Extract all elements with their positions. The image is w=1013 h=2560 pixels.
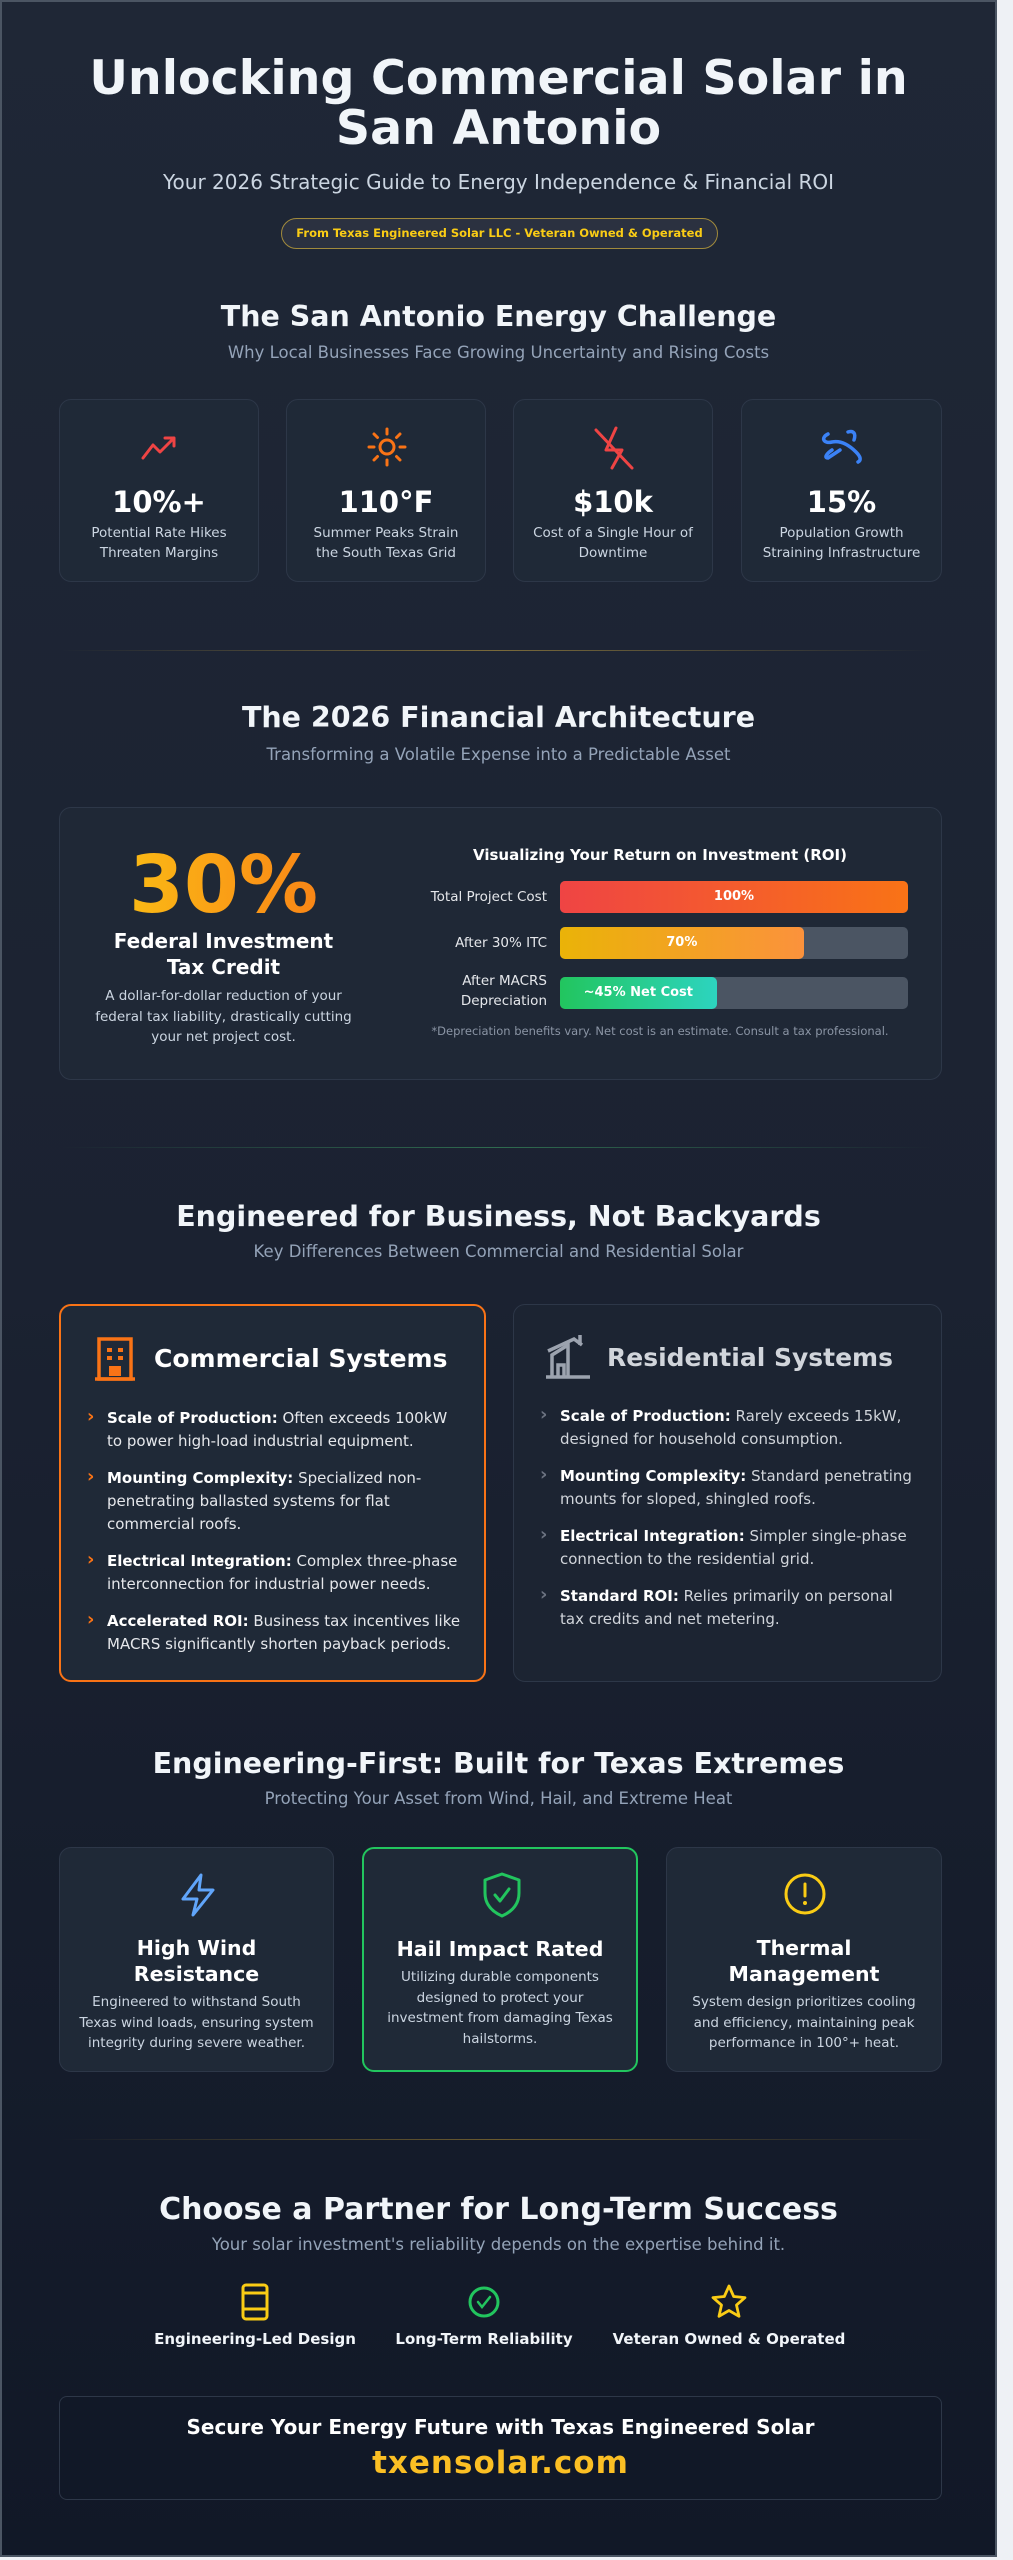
card: heat [286,399,486,582]
title: High Wind [137,1936,256,1960]
bar chart: After MACRS [462,973,547,989]
subheading: Protecting Your Asset from Wind, Hail, and Extreme Heat [265,1789,732,1808]
title: Commercial Systems [154,1344,447,1373]
description: Downtime [579,545,647,561]
icon: building [95,1337,135,1381]
icon: trend up [141,436,176,460]
title: Residential Systems [607,1343,893,1372]
list: Scale of Production: Rarely exceeds 15kW, designed for household consumption. [560,1407,901,1448]
stat: $10k [573,485,653,519]
big stat 30%: 30% [129,839,318,931]
heading: engineering-first: Engineering-First: Built for Texas Extremes [153,1747,844,1780]
ITC label: Tax Credit [167,955,280,979]
description: Cost of a Single Hour of [533,525,693,541]
feature: engineering-led design: Engineering-Led Design [154,2330,356,2348]
subheading: Why Local Businesses Face Growing Uncertainty and Rising Costs [228,343,769,362]
description: Engineered to withstand South Texas wind loads, ensuring system integrity during severe weather. [79,1994,314,2051]
ITC description: A dollar-for-dollar reduction of your federal tax liability, drastically cutting your net project cost. [95,988,352,1045]
subheading: Transforming a Volatile Expense into a Predictable Asset [266,745,730,764]
stat: 15% [807,485,876,519]
list: Electrical Integration: Complex three-phase interconnection for industrial power needs. [107,1552,457,1593]
list: Mounting Complexity: Specialized non-penetrating ballasted systems for flat commercial roofs. [107,1469,421,1533]
bar chart: After 30% ITC [455,935,547,951]
bar chart: Depreciation [461,993,547,1009]
list: Accelerated ROI: Business tax incentives like MACRS significantly shorten payback periods. [107,1612,460,1653]
bar chart: ~45% Net Cost [584,985,693,1000]
list: Scale of Production: Often exceeds 100kW to power high-load industrial equipment. [107,1409,447,1450]
card: population [741,399,942,582]
description: Threaten Margins [100,545,218,561]
card: thermal [666,1847,942,2072]
URL: txensolar.com [372,2445,629,2481]
list [88,1409,460,1653]
feature: reliability [395,2286,573,2348]
badge [281,218,718,249]
ITC label: Federal Investment [114,929,333,953]
heading: financial architecture: The 2026 Financial Architecture [242,701,755,734]
subheading: Your solar investment's reliability depends on the expertise behind it. [212,2235,785,2254]
description [533,525,694,561]
list: Standard ROI: Relies primarily on personal tax credits and net metering. [560,1587,893,1628]
description [91,525,227,561]
description: the South Texas Grid [316,545,456,561]
title: San Antonio [336,101,661,156]
card: downtime [513,399,713,582]
description: Potential Rate Hikes [91,525,227,541]
stat: 10%+ [112,485,206,519]
bar chart: 70% [666,935,697,950]
panel: residential systems [513,1304,942,1682]
description: Utilizing durable components designed to protect your investment from damaging Texas hailstorms. [387,1969,613,2046]
bar chart: Total Project Cost [431,889,547,905]
title: Thermal [757,1936,851,1960]
heading: partner: Choose a Partner for Long-Term Success [159,2192,838,2227]
title [134,1936,259,1986]
list [542,1407,912,1628]
panel: commercial systems [59,1304,486,1682]
card: hail [362,1847,638,2072]
subtitle: Your 2026 Strategic Guide to Energy Independence & Financial ROI [163,170,834,194]
chart title: Visualizing Your Return on Investment (ROI) [473,846,847,864]
icon: power off [594,426,634,470]
subheading: Key Differences Between Commercial and Residential Solar [254,1242,743,1261]
heading: commercial vs residential: Engineered for Business, Not Backyards [176,1200,821,1233]
feature: engineering-led design [154,2284,356,2348]
icon: check circle [468,2286,500,2318]
description [763,525,920,561]
title: Hail Impact Rated [397,1937,603,1961]
icon: star [712,2284,746,2318]
description: Population Growth [779,525,904,541]
bar chart [430,881,908,1009]
description: System design prioritizes cooling and efficiency, maintaining peak performance in 100°+ heat. [692,1994,916,2051]
list: Electrical Integration: Simpler single-phase connection to the residential grid. [560,1527,907,1568]
panel: financial [59,807,942,1080]
badge: From Texas Engineered Solar LLC - Veteran Owned & Operated [296,226,703,240]
title: Management [729,1962,879,1986]
description: Summer Peaks Strain [314,525,458,541]
bar chart: 100% [714,889,754,904]
footnote: *Depreciation benefits vary. Net cost is an estimate. Consult a tax professional. [431,1024,889,1038]
icon: growth [822,430,862,464]
title [89,51,908,156]
icon: sun [368,428,406,466]
feature: veteran owned [612,2284,845,2348]
heading: energy challenge: The San Antonio Energy Challenge [221,300,776,333]
title: Resistance [134,1962,259,1986]
icon: bolt [181,1874,215,1916]
description: Straining Infrastructure [763,545,920,561]
CTA box [59,2396,942,2500]
title: Unlocking Commercial Solar in [89,51,908,106]
description [314,525,458,561]
card: high wind [59,1847,334,2072]
card: rate hikes [59,399,259,582]
CTA text: Secure Your Energy Future with Texas Engineered Solar [186,2415,815,2439]
icon: alert circle [784,1874,826,1914]
icon: shield check [484,1872,520,1918]
list: Mounting Complexity: Standard penetrating mounts for sloped, shingled roofs. [560,1467,912,1508]
big stat 30% [60,842,387,928]
stat: 110°F [339,485,433,519]
title [729,1936,879,1986]
icon: book [242,2284,268,2320]
icon: house [546,1335,590,1379]
ITC label [114,929,333,979]
feature: reliability: Long-Term Reliability [395,2330,573,2348]
feature: veteran owned: Veteran Owned & Operated [613,2330,845,2348]
